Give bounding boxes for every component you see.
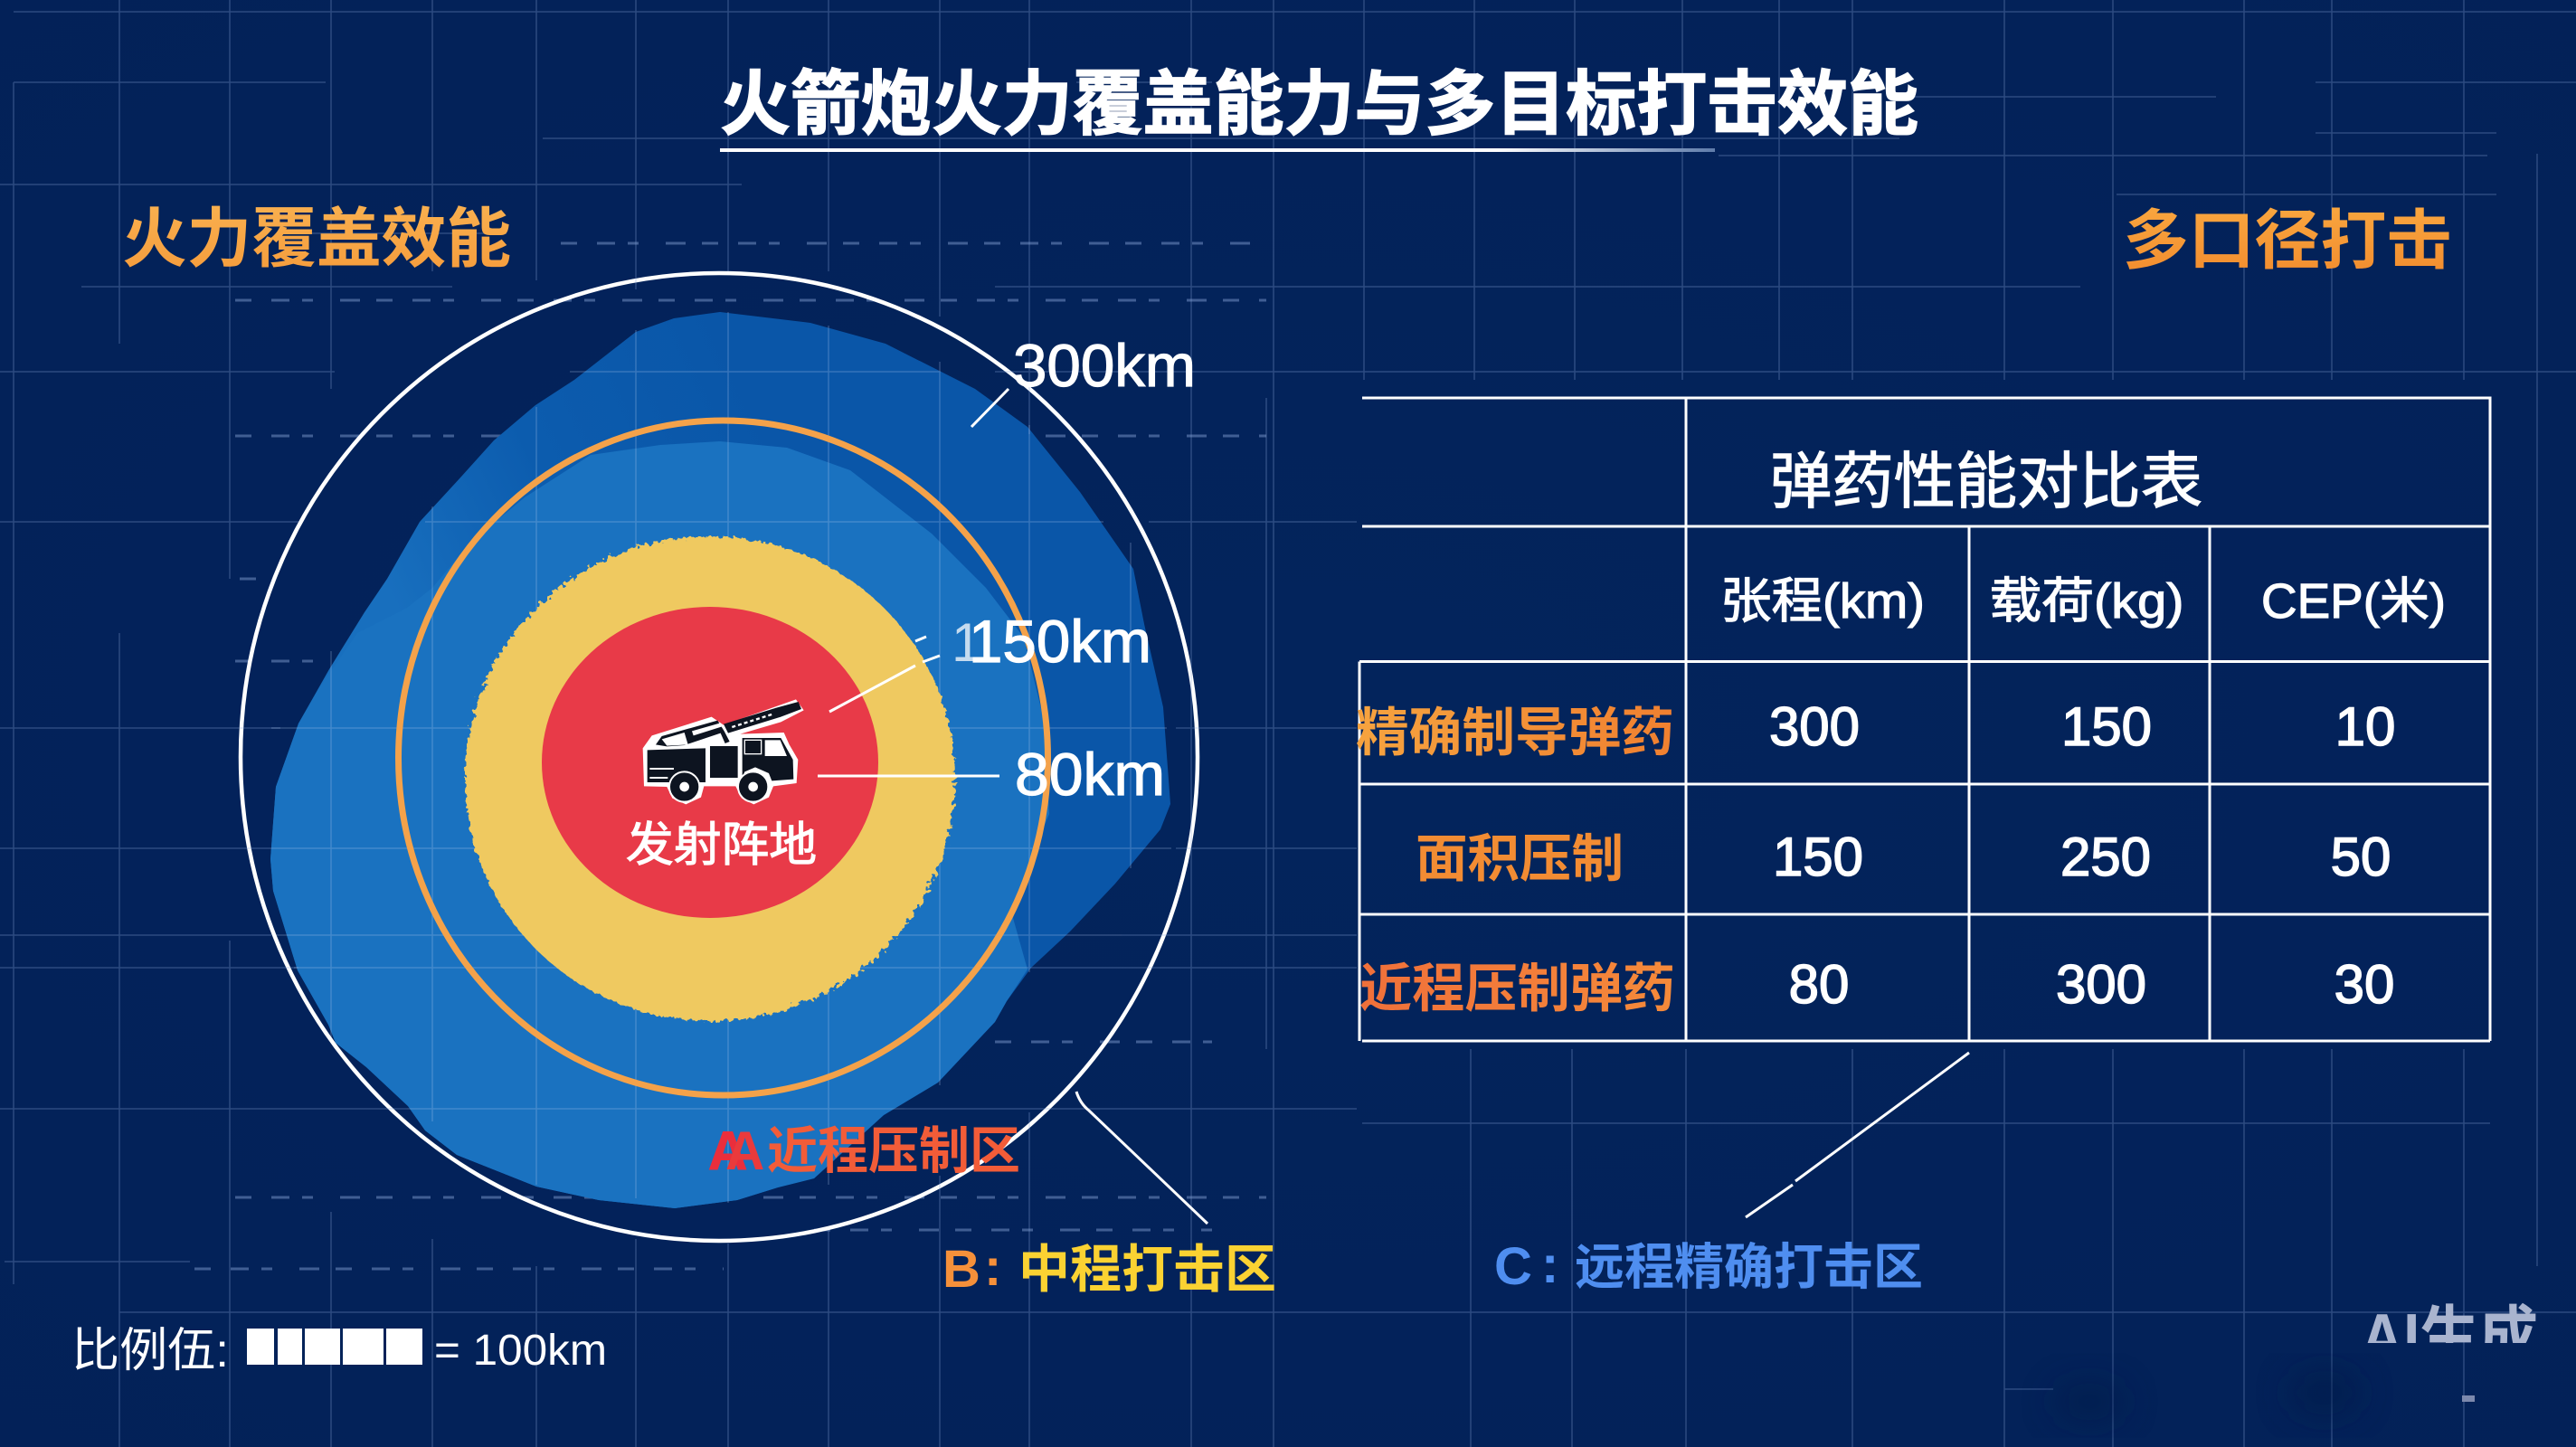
ring: 150km orange bbox=[398, 421, 1047, 1095]
scale legend bbox=[71, 1325, 607, 1377]
title underline bbox=[720, 148, 1715, 152]
label: 150km: 150km bbox=[969, 608, 1151, 675]
scale caption: 比例伍: bbox=[71, 1325, 229, 1377]
leader line: zone B bbox=[1076, 1092, 1208, 1224]
row: precision guided: 300 bbox=[1769, 696, 1860, 757]
scale value: = 100km bbox=[434, 1327, 607, 1375]
label: 300km: 300km bbox=[1013, 332, 1196, 399]
row: precision guided: 10 bbox=[2335, 696, 2395, 757]
row: close-range suppression bbox=[1359, 954, 2394, 1018]
row: close-range suppression: 300 bbox=[2056, 954, 2146, 1015]
ring: 300km white bbox=[241, 273, 1198, 1241]
label: zone C long-range precision strike: 远程精确打击区 bbox=[1575, 1239, 1923, 1295]
table: ammunition performance bbox=[1356, 398, 2490, 1041]
leader line: 80km bbox=[818, 774, 999, 778]
leader line: 150km bbox=[829, 637, 940, 712]
grid overlay on zones bbox=[271, 312, 1171, 1203]
row: area suppression: 面积压制 bbox=[1416, 830, 1624, 888]
zone: yellow 150km area bbox=[465, 536, 955, 1021]
scale boxes bbox=[247, 1329, 422, 1365]
label: zone B medium-range strike: B bbox=[942, 1240, 980, 1299]
title: 火箭炮火力覆盖能力与多目标打击效能 bbox=[720, 64, 1918, 144]
label: zone A close-range suppression: A bbox=[725, 1121, 764, 1181]
label: 150km: 1 bbox=[952, 612, 981, 673]
row: area suppression: 50 bbox=[2331, 827, 2391, 887]
zone: middle band blob bbox=[270, 441, 1049, 1208]
label: zone B medium-range strike: 中程打击区 bbox=[1018, 1241, 1276, 1299]
row: area suppression bbox=[1416, 827, 2391, 888]
heading: multi-calibre strike: 多口径打击 bbox=[2123, 205, 2452, 278]
coverage zones chart bbox=[241, 273, 1198, 1241]
row: precision guided: 精确制导弹药 bbox=[1356, 704, 1674, 762]
label: zone A close-range suppression: A bbox=[708, 1121, 747, 1181]
watermark: AI generated: AI生成 bbox=[2361, 1301, 2538, 1374]
table grid lines bbox=[1359, 398, 2490, 1041]
label: zone C long-range precision strike: C bbox=[1494, 1237, 1532, 1296]
label: launch position: 发射阵地 bbox=[626, 819, 817, 872]
row: precision guided bbox=[1356, 696, 2395, 762]
zone: red 80km area bbox=[542, 607, 878, 918]
leader line: 300km bbox=[971, 389, 1009, 427]
label: zone A close-range suppression: 近程压制区 bbox=[767, 1122, 1020, 1179]
row: close-range suppression: 30 bbox=[2334, 954, 2394, 1015]
label: zone C long-range precision strike: : bbox=[1541, 1235, 1558, 1294]
icon: rocket launcher truck bbox=[643, 699, 804, 804]
column header: payload: 载荷(kg) bbox=[1990, 574, 2183, 629]
row: precision guided: 150 bbox=[2061, 696, 2152, 757]
table title: 弹药性能对比表 bbox=[1770, 448, 2202, 516]
row: close-range suppression: 近程压制弹药 bbox=[1359, 960, 1675, 1018]
column header: range: 张程(km) bbox=[1720, 574, 1925, 629]
row: area suppression: 250 bbox=[2060, 827, 2151, 887]
column header: CEP: CEP(米) bbox=[2261, 574, 2446, 629]
zone: outer long-range blob bbox=[270, 312, 1170, 1208]
row: close-range suppression: 80 bbox=[1789, 954, 1849, 1015]
label: zone B medium-range strike: : bbox=[984, 1238, 1001, 1297]
row: area suppression: 150 bbox=[1773, 827, 1863, 887]
label: 80km: 80km bbox=[1015, 741, 1165, 808]
leader line: zone C bbox=[1746, 1053, 1969, 1217]
heading: fire coverage: 火力覆盖效能 bbox=[122, 203, 511, 276]
